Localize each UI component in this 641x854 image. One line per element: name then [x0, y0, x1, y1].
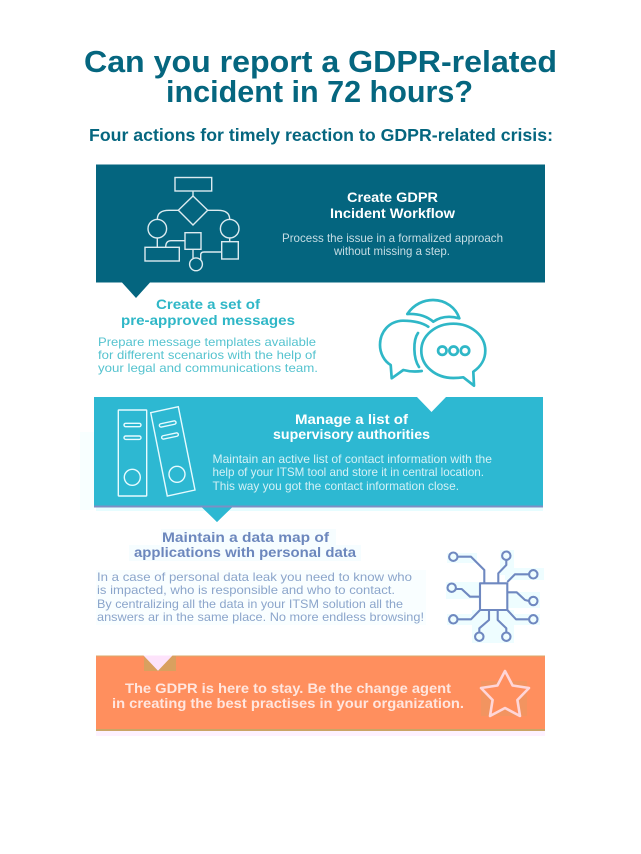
heading: create GDPR incident workflow	[330, 190, 456, 222]
text: closing message	[112, 681, 464, 712]
icon: flowchart	[145, 178, 239, 271]
text: messages description: Prepare message templates available	[98, 335, 316, 349]
text: authorities description: This way you got the contact information close.	[212, 480, 459, 493]
subtitle: Four actions for timely reaction to GDPR-related crisis:	[89, 125, 553, 145]
panel: manage supervisory authorities	[80, 397, 543, 522]
text: authorities description	[212, 453, 492, 493]
text: data map description: In a case of personal data leak you need to know who	[97, 570, 412, 584]
heading: create GDPR incident workflow: Create GDPR	[347, 190, 438, 206]
text: workflow description: without missing a step.	[333, 245, 450, 258]
text: messages description: for different scenarios with the help of	[98, 348, 317, 362]
icon: circuit chip	[446, 550, 544, 643]
text: authorities description: help of your ITSM tool and store it in central location.	[212, 466, 484, 479]
heading: supervisory authorities: Manage a list of	[295, 412, 408, 428]
text: messages description: your legal and communications team.	[98, 361, 318, 375]
panel: closing call to action	[96, 656, 545, 736]
heading: supervisory authorities: supervisory authorities	[273, 427, 430, 443]
text: data map description: answers ar in the same place. No more endless browsing!	[97, 610, 424, 624]
panel: data map	[96, 529, 544, 643]
panel: pre-approved messages	[96, 297, 546, 392]
panel: create GDPR incident workflow	[96, 164, 545, 298]
text: workflow description	[282, 232, 503, 258]
text: authorities description: Maintain an active list of contact information with the	[212, 453, 492, 466]
text: data map description	[97, 570, 424, 624]
text: messages description	[98, 335, 318, 375]
heading: supervisory authorities	[273, 412, 430, 443]
text: closing message: The GDPR is here to stay. Be the change agent	[125, 681, 451, 697]
heading: data map	[134, 530, 356, 561]
text: closing message: in creating the best practises in your organization.	[112, 696, 464, 712]
heading: data map: applications with personal data	[134, 545, 356, 561]
title: Can you report a GDPR-related	[84, 45, 557, 79]
text: workflow description: Process the issue in a formalized approach	[282, 232, 503, 245]
text: data map description: is impacted, who is responsible and who to contact.	[97, 583, 395, 597]
icon: binders	[118, 407, 195, 496]
heading: pre-approved messages	[121, 297, 295, 329]
text: data map description: By centralizing all the data in your ITSM solution all the	[97, 597, 403, 611]
heading: create GDPR incident workflow: Incident Workflow	[330, 206, 456, 222]
heading: pre-approved messages: Create a set of	[156, 297, 260, 313]
title	[84, 45, 557, 109]
heading: data map: Maintain a data map of	[162, 530, 329, 546]
title: incident in 72 hours?	[166, 75, 473, 109]
arrow: notch	[144, 656, 172, 671]
icon: speech bubbles	[380, 300, 485, 386]
heading: pre-approved messages: pre-approved messages	[121, 313, 295, 329]
icon: star	[481, 671, 529, 716]
